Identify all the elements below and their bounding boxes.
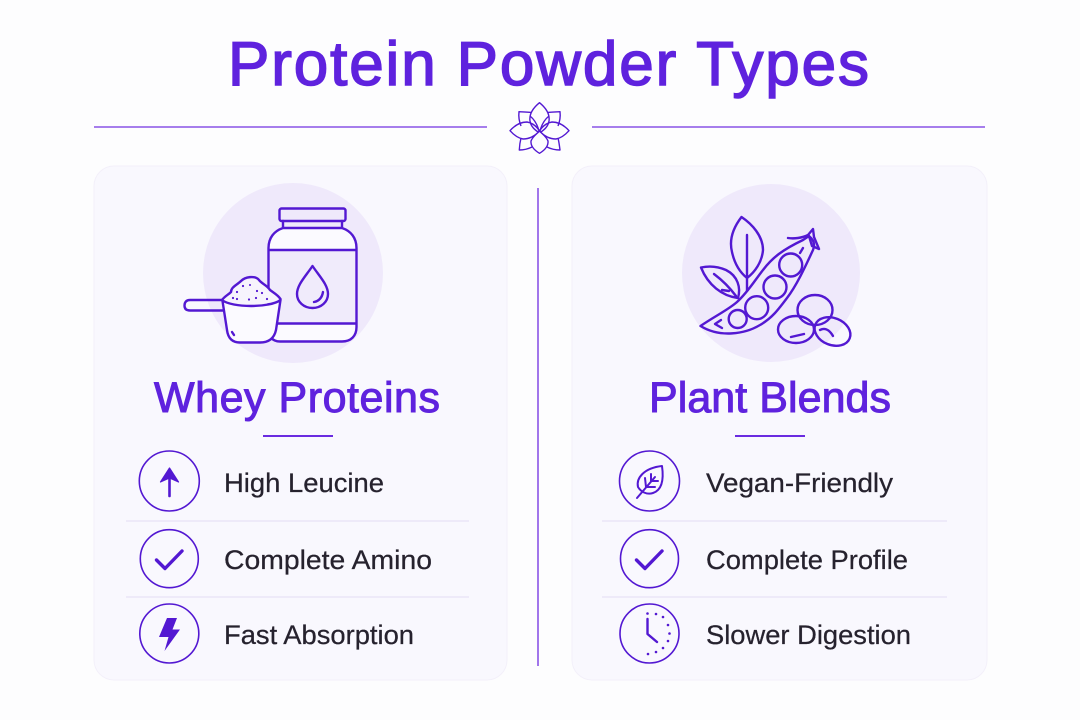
item: vegan-friendly xyxy=(620,451,894,511)
item: fast absorption: Fast Absorption xyxy=(224,620,414,650)
heading: whey proteins: Whey Proteins xyxy=(154,374,440,422)
item: vegan-friendly: Vegan-Friendly xyxy=(706,468,894,498)
center divider xyxy=(537,188,539,666)
item: slower digestion xyxy=(620,604,911,663)
icon: pea pod, leaves and beans xyxy=(682,184,860,362)
item: complete profile: Complete Profile xyxy=(706,545,908,575)
item: high leucine xyxy=(139,451,384,511)
panel: plant blends xyxy=(572,166,987,680)
item: fast absorption xyxy=(140,604,414,663)
item: slower digestion: Slower Digestion xyxy=(706,620,911,650)
item: high leucine: High Leucine xyxy=(224,468,384,498)
icon: lotus xyxy=(510,103,569,153)
item: complete amino xyxy=(140,530,432,588)
item: complete profile xyxy=(620,530,908,588)
item: complete amino: Complete Amino xyxy=(224,545,432,575)
ornament divider with lotus xyxy=(94,103,985,153)
icon: protein jar and scoop xyxy=(184,183,383,363)
panel: whey proteins xyxy=(94,166,507,680)
title: Protein Powder Types xyxy=(228,30,869,99)
heading: plant blends: Plant Blends xyxy=(649,374,891,422)
